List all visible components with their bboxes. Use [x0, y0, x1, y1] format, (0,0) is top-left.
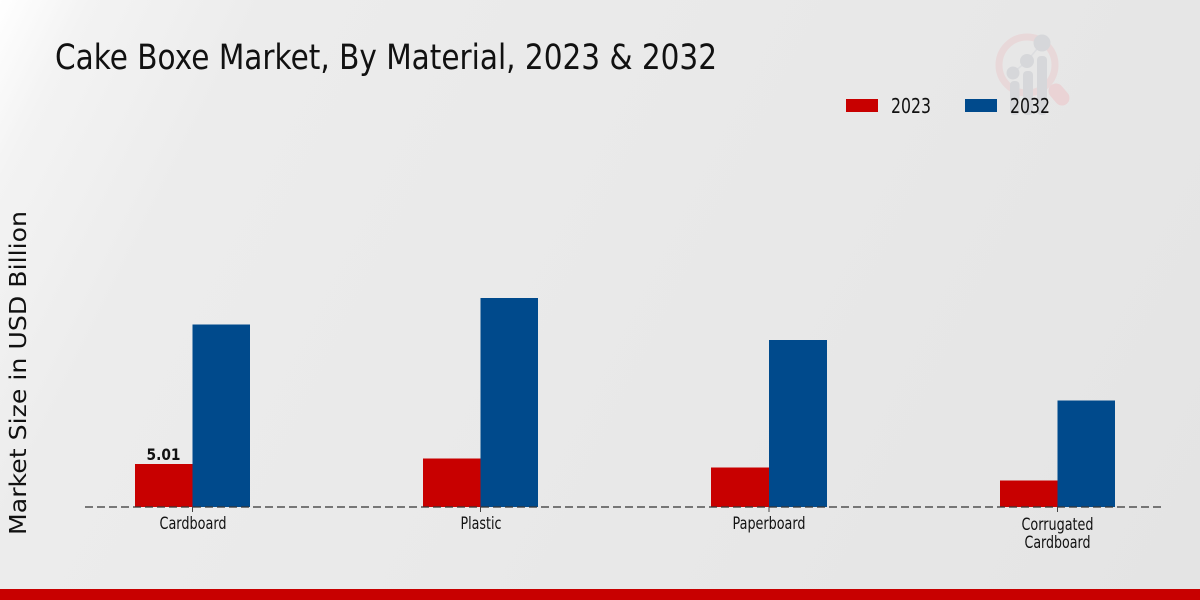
group: Corrugated Cardboard	[1000, 400, 1115, 552]
legend item: 2032: 2032	[1010, 94, 1050, 118]
group: Corrugated Cardboard: Corrugated	[1022, 515, 1094, 534]
bar chart	[85, 298, 1164, 552]
y-axis title: Market Size in USD Billion	[6, 211, 32, 535]
group: Cardboard	[135, 324, 250, 533]
legend item: 2032	[965, 94, 1050, 118]
group: Cardboard: Cardboard	[160, 514, 226, 533]
group: Cardboard: 5.01	[146, 445, 180, 464]
legend item: 2023: 2023	[891, 94, 931, 118]
watermark logo	[999, 34, 1062, 115]
legend	[846, 94, 1050, 118]
group: Paperboard	[711, 340, 827, 533]
group: Corrugated Cardboard: Cardboard	[1024, 533, 1090, 552]
group: Plastic: Plastic	[460, 514, 502, 533]
footer bar	[0, 589, 1200, 600]
title: Cake Boxe Market, By Material, 2023 & 2032	[55, 38, 717, 78]
group: Paperboard: Paperboard	[732, 514, 806, 533]
group: Plastic	[423, 298, 538, 533]
legend item: 2023	[846, 94, 931, 118]
